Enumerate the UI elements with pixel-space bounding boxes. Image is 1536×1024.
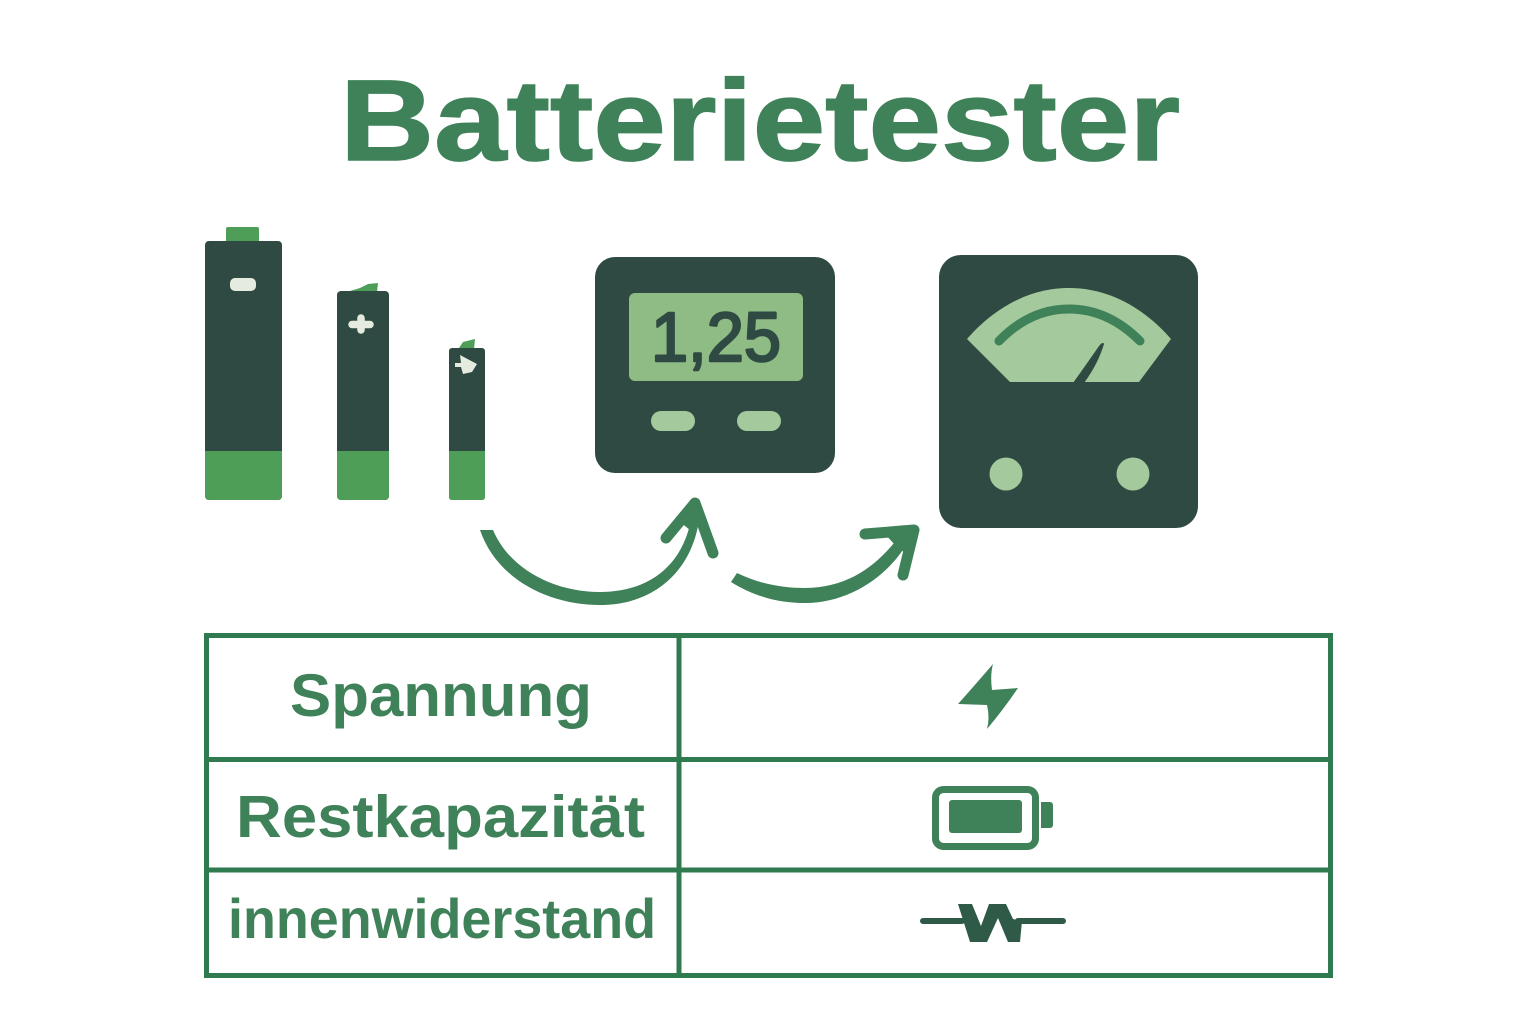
title: Batterietester bbox=[340, 57, 1180, 185]
arrow: batteries to digital tester bbox=[480, 503, 713, 605]
tester display bbox=[629, 293, 803, 381]
table: battery test parameters bbox=[206, 635, 1331, 976]
meter gauge bbox=[967, 288, 1171, 383]
row label: innenwiderstand: innenwiderstand bbox=[228, 887, 656, 950]
icon: medium battery bbox=[337, 283, 389, 500]
icon: large battery bbox=[205, 227, 282, 500]
icon: lightning bolt bbox=[958, 664, 1018, 729]
icon: analog meter bbox=[939, 255, 1198, 528]
meter knobs bbox=[990, 458, 1150, 490]
row label: Spannung: Spannung bbox=[290, 662, 592, 729]
icon: digital tester bbox=[595, 257, 835, 473]
icon: battery level bbox=[936, 790, 1053, 846]
icon: small battery bbox=[449, 339, 485, 500]
tester display: 1,25 bbox=[651, 298, 781, 376]
tester buttons bbox=[651, 411, 781, 431]
arrow: digital tester to analog meter bbox=[731, 530, 914, 603]
icon: resistor bbox=[923, 904, 1063, 942]
row label: Restkapazität: Restkapazität bbox=[236, 784, 645, 850]
